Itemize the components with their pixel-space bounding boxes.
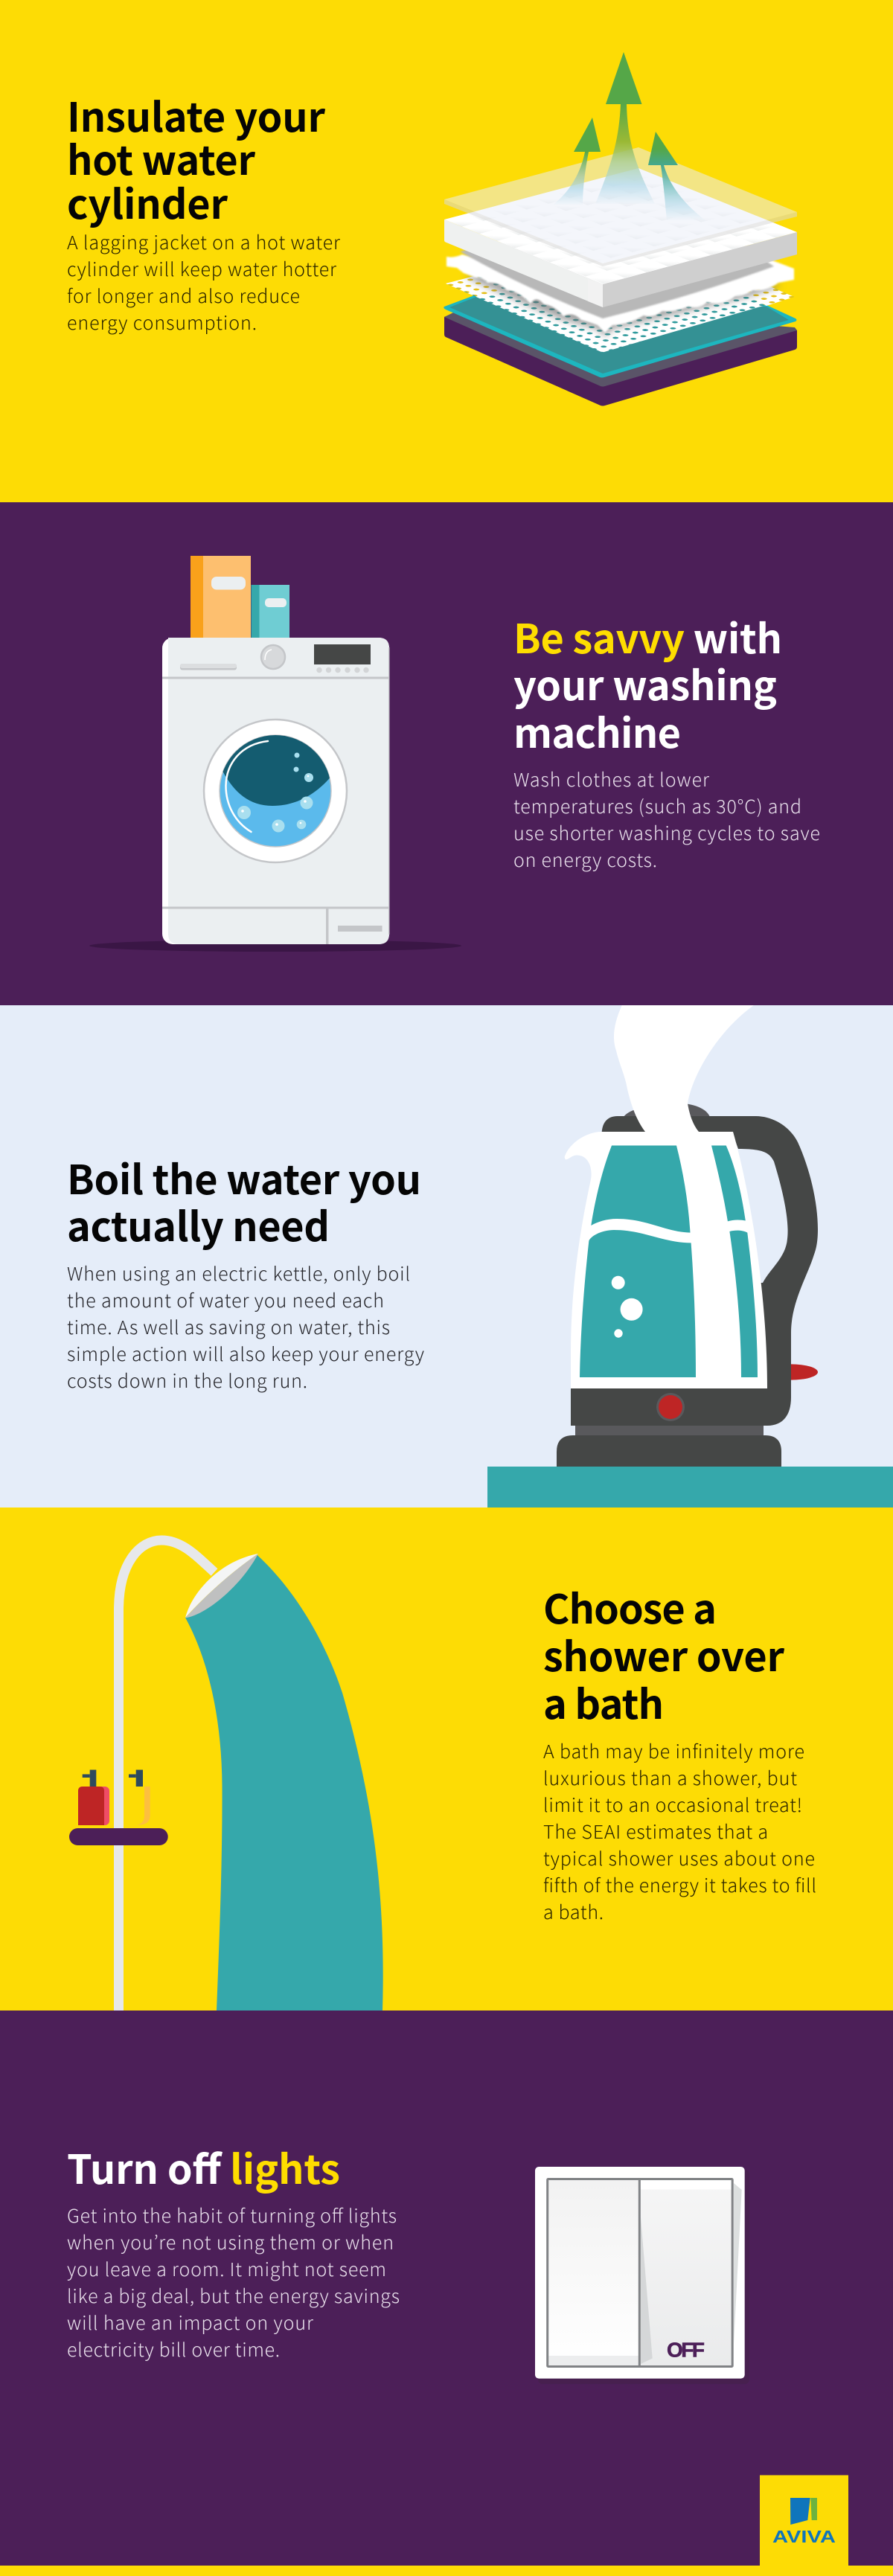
plate <box>535 2167 745 2379</box>
red lever <box>764 1364 818 1380</box>
shelf <box>69 1828 168 1845</box>
body text: insulate: A lagging jacket on a hot water <box>67 228 341 255</box>
heading: choose a shower: Choose a <box>543 1577 717 1635</box>
heading: insulate: cylinder <box>67 172 228 231</box>
footer stripe <box>0 2566 893 2576</box>
body text: lights: electricity bill over time. <box>67 2336 280 2362</box>
purple base layer <box>444 301 797 406</box>
icon: layered insulation with rising heat arrows <box>444 52 797 406</box>
body text: washing: Wash clothes at lower <box>513 766 710 792</box>
heading: choose a shower: a bath <box>543 1672 664 1731</box>
kettle white shell <box>565 1132 767 1388</box>
heat arrows <box>552 52 706 221</box>
body text: insulate: energy consumption. <box>67 309 257 336</box>
body text: shower: typical shower uses about one <box>543 1845 815 1871</box>
display and buttons <box>314 644 371 673</box>
plate shadow <box>538 2170 749 2384</box>
heading: be savvy <box>513 606 782 760</box>
body text: kettle <box>67 1260 424 1394</box>
handle and base band <box>571 1116 818 1426</box>
body text: shower <box>543 1737 816 1925</box>
body text: shower: a bath. <box>543 1898 604 1925</box>
machine body <box>162 638 390 944</box>
heading: insulate: Insulate your <box>67 85 325 144</box>
body text: shower: The SEAI estimates that a <box>543 1818 768 1845</box>
body text: shower: limit it to an occasional treat! <box>543 1791 802 1818</box>
body text: insulate <box>67 228 341 336</box>
icon: light switch <box>535 2167 749 2384</box>
mattress underside shadow <box>460 238 774 318</box>
left rocker <box>548 2179 639 2366</box>
heading: be savvy: your washing <box>513 653 777 712</box>
heading: choose a shower: shower over <box>543 1624 784 1683</box>
bubbles <box>612 1276 643 1338</box>
body text: kettle: time. As well as saving on water, this <box>67 1313 390 1340</box>
panel: lights <box>0 2011 893 2576</box>
heading: boil the water: actually need <box>67 1194 330 1253</box>
OFF label: OFF <box>667 2339 705 2362</box>
lid <box>624 1103 710 1117</box>
body text: shower: A bath may be infinitely more <box>543 1737 804 1764</box>
switch frame <box>548 2179 732 2366</box>
body text: lights: Get into the habit of turning off lights <box>67 2202 397 2229</box>
steam <box>614 1005 754 1132</box>
mattress block <box>444 168 797 307</box>
base <box>557 1435 781 1467</box>
body text: kettle: the amount of water you need each <box>67 1287 384 1313</box>
perforated sheet <box>446 268 794 353</box>
body text: washing: on energy costs. <box>513 846 657 873</box>
body text: lights <box>67 2202 400 2362</box>
shower head <box>185 1554 258 1618</box>
neck <box>575 1426 764 1435</box>
heading: turn off lights: Turn off lights <box>67 2137 340 2196</box>
body text: lights: will have an impact on your <box>67 2309 314 2336</box>
heading: be savvy: machine <box>513 701 681 760</box>
floor shadow <box>89 940 461 952</box>
body text: washing: temperatures (such as 30°C) and <box>513 792 801 819</box>
pipe <box>119 1540 214 2011</box>
body text: kettle: costs down in the long run. <box>67 1367 307 1394</box>
water windows <box>580 1146 758 1377</box>
body text: washing: use shorter washing cycles to save <box>513 819 820 846</box>
heading: boil the water <box>67 1147 421 1253</box>
heading: choose a shower <box>543 1577 784 1731</box>
heading: insulate <box>67 85 325 231</box>
body text: insulate: cylinder will keep water hotter <box>67 255 337 282</box>
foam shadow <box>465 260 781 336</box>
panel: washing machine <box>89 556 819 952</box>
teal layer <box>444 295 796 378</box>
power light <box>656 1393 685 1421</box>
right rocker <box>639 2179 733 2366</box>
body text: washing <box>513 766 820 873</box>
logo: Aviva: AVIVA <box>772 2527 836 2546</box>
body text: lights: when you’re not using them or when <box>67 2229 394 2255</box>
right shade <box>734 2183 742 2344</box>
body text: shower: luxurious than a shower, but <box>543 1764 797 1791</box>
heading: insulate: hot water <box>67 128 255 187</box>
door <box>204 720 347 862</box>
water stream <box>185 1555 383 2011</box>
body text: kettle: simple action will also keep your energy <box>67 1340 424 1367</box>
control knob <box>261 645 285 669</box>
panel: insulate your hot water cylinder <box>0 0 893 502</box>
body text: lights: you leave a room. It might not seem <box>67 2255 386 2282</box>
counter top <box>487 1467 893 1508</box>
heading: boil the water: Boil the water you <box>67 1147 421 1206</box>
body text: insulate: for longer and also reduce <box>67 282 300 309</box>
foam layer <box>446 254 794 333</box>
translucent top sheet <box>444 147 797 266</box>
red bottle <box>78 1769 109 1825</box>
body text: lights: like a big deal, but the energy savings <box>67 2282 400 2309</box>
logo: Aviva <box>760 2475 848 2566</box>
icon: washing machine <box>89 556 461 952</box>
detergent boxes <box>191 556 289 638</box>
icon: kettle <box>557 1005 818 1467</box>
body text: kettle: When using an electric kettle, only boil <box>67 1260 410 1287</box>
panel: kettle <box>0 1005 893 1508</box>
yellow bottle <box>129 1769 150 1825</box>
body text: shower: fifth of the energy it takes to fill <box>543 1871 816 1898</box>
heading: be savvy: Be savvy with <box>513 606 782 665</box>
icon: shower <box>69 1540 383 2011</box>
panel: shower <box>0 1508 893 2011</box>
